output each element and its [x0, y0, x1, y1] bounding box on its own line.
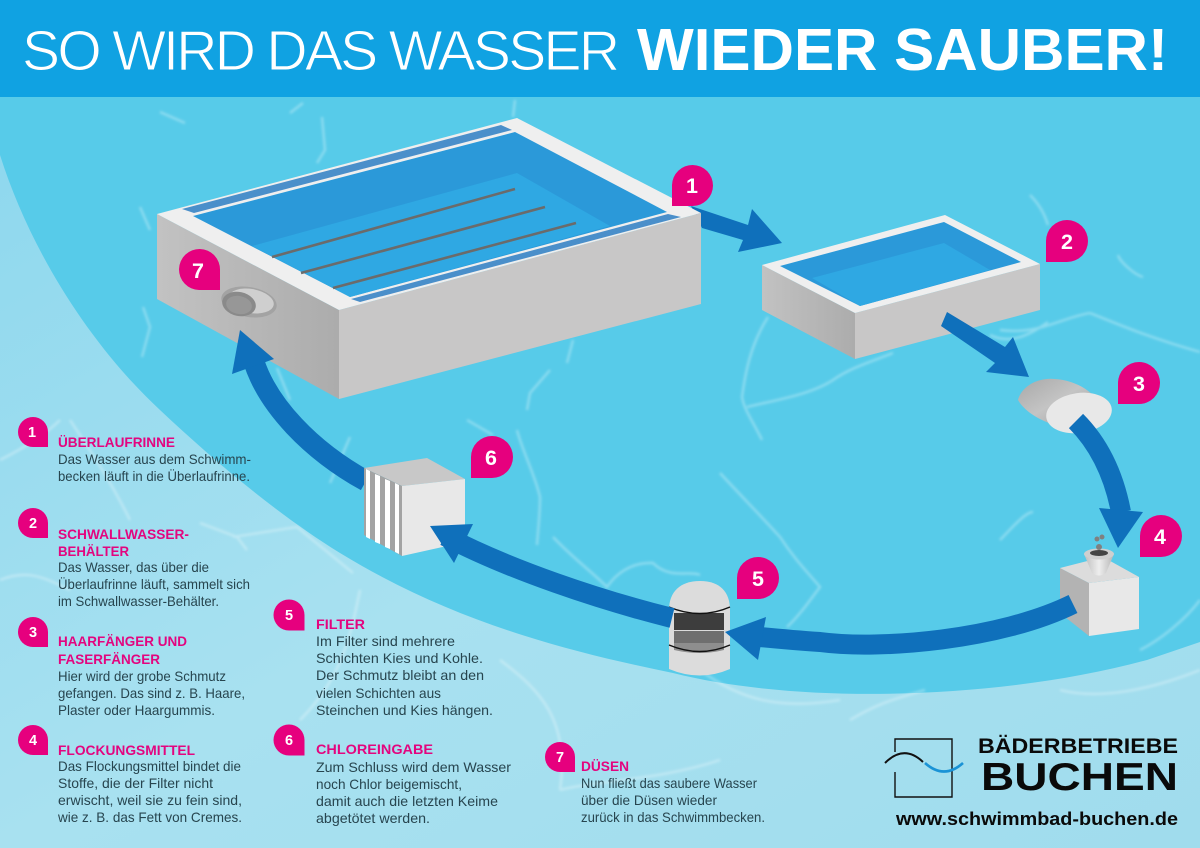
header bar [0, 0, 1200, 97]
step 6: damit auch die letzten Keime [316, 794, 498, 809]
step 7: 7 [556, 750, 564, 766]
title: WIEDER SAUBER! [637, 17, 1168, 83]
step 2: BEHÄLTER [58, 543, 129, 559]
step 6: abgetötet werden. [316, 811, 430, 826]
step 6: noch Chlor beigemischt, [316, 777, 462, 792]
nozzle [219, 282, 279, 322]
pin 5: 5 [752, 567, 764, 591]
step 6: CHLOREINGABE [316, 741, 433, 757]
step 5: Der Schmutz bleibt an den [316, 668, 484, 683]
step 7: zurück in das Schwimmbecken. [581, 810, 765, 825]
arrow: chlorine cube to pool nozzle [232, 330, 366, 481]
step 6: Zum Schluss wird dem Wasser [316, 760, 511, 775]
step 5: vielen Schichten aus [316, 686, 441, 701]
pin 4 [1140, 515, 1182, 557]
step 2 [18, 508, 250, 609]
title: SO WIRD DAS WASSER [22, 19, 620, 83]
step 5: Steinchen und Kies hängen. [316, 703, 493, 718]
step 3: HAARFÄNGER UND [58, 633, 187, 649]
step 1: becken läuft in die Überlaufrinne. [58, 467, 250, 484]
step 4: wie z. B. das Fett von Cremes. [57, 810, 242, 825]
step 4: Das Flockungsmittel bindet die [58, 759, 241, 774]
step 4: Stoffe, die der Filter nicht [58, 776, 213, 791]
funnel [1084, 534, 1114, 576]
flocculant cube [1060, 534, 1139, 636]
pin 6: 6 [485, 446, 497, 470]
pin 2 [1046, 220, 1088, 262]
chlorine cube [364, 458, 465, 556]
step 3: FASERFÄNGER [58, 651, 160, 667]
step 4: erwischt, weil sie zu fein sind, [58, 793, 242, 808]
step 7: DÜSEN [581, 758, 629, 774]
step 4 [18, 725, 242, 825]
logo wordmark [978, 735, 1178, 799]
step 5: FILTER [316, 616, 365, 632]
logo mark [885, 739, 963, 797]
step 3: Hier wird der grobe Schmutz [58, 669, 226, 684]
step 4: 4 [29, 733, 37, 749]
arrow: flocculant to filter [750, 604, 1073, 645]
pin 3 [1118, 362, 1160, 404]
step 1: 1 [28, 425, 36, 441]
pin 5 [737, 557, 779, 599]
step 3 [18, 617, 245, 718]
arrow: filter to chlorine cube [430, 524, 672, 618]
pin 4: 4 [1154, 525, 1166, 549]
logo [885, 735, 1178, 829]
pin 1: 1 [686, 174, 698, 198]
swimming pool [157, 118, 701, 399]
step 7 [545, 742, 765, 825]
step 5: Im Filter sind mehrere [316, 634, 455, 649]
pin 6 [471, 436, 513, 478]
step 3: 3 [29, 625, 37, 641]
pin 1 [672, 165, 713, 206]
step 7: über die Düsen wieder [581, 793, 717, 808]
website: www.schwimmbad-buchen.de [895, 808, 1178, 829]
pin 7 [179, 249, 220, 290]
step 6: 6 [285, 733, 293, 749]
arrow: hair catcher to flocculant [1076, 421, 1143, 548]
step 5: 5 [285, 608, 293, 624]
sand filter [669, 581, 730, 676]
step 4: FLOCKUNGSMITTEL [58, 742, 195, 758]
pin 7: 7 [192, 259, 204, 283]
step 1: Das Wasser aus dem Schwimm- [58, 452, 251, 467]
hair catcher [1018, 379, 1114, 437]
step 3: Plaster oder Haargummis. [58, 703, 215, 718]
step 7: Nun fließt das saubere Wasser [581, 776, 757, 791]
step 2: im Schwallwasser-Behälter. [58, 594, 219, 609]
logo wordmark: BÄDERBETRIEBE [978, 735, 1178, 758]
arrow: surge tank to hair catcher [941, 312, 1029, 377]
step 2: Das Wasser, das über die [58, 560, 209, 575]
pin 2: 2 [1061, 230, 1073, 254]
arrow head: into filter [725, 617, 766, 660]
step 1: ÜBERLAUFRINNE [58, 434, 175, 450]
pin 3: 3 [1133, 372, 1145, 396]
step 3: gefangen. Das sind z. B. Haare, [58, 686, 245, 701]
logo wordmark: BUCHEN [981, 756, 1178, 799]
arrow: pool to surge tank [691, 206, 782, 252]
step 6 [274, 724, 511, 826]
step 5: Schichten Kies und Kohle. [316, 651, 483, 666]
title [22, 17, 1168, 83]
step 1 [18, 417, 251, 484]
step 2: SCHWALLWASSER- [58, 526, 189, 542]
step 2: Überlaufrinne läuft, sammelt sich [58, 575, 250, 592]
step 5 [274, 600, 493, 718]
step 2: 2 [29, 516, 37, 532]
surge tank [762, 215, 1040, 359]
